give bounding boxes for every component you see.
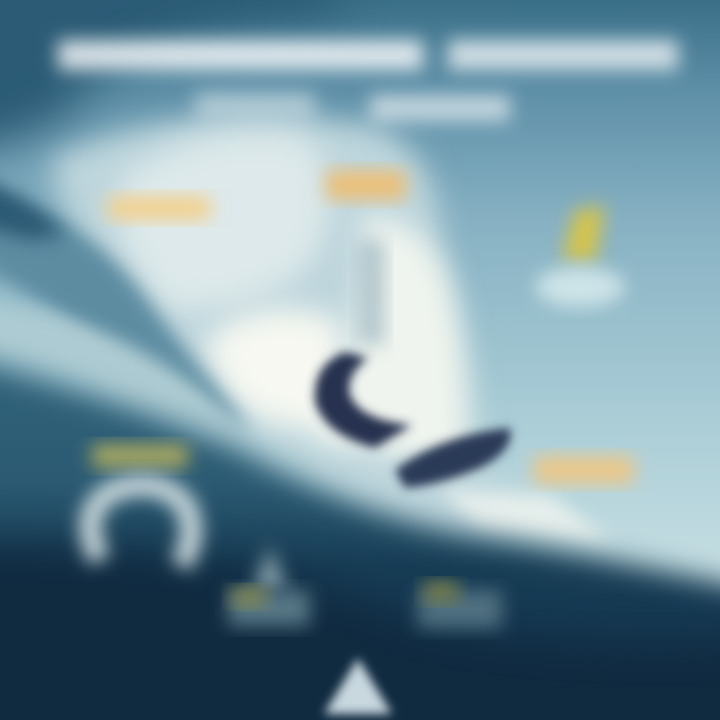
- label: lower-left olive: [92, 444, 188, 468]
- deep sea: [0, 346, 720, 684]
- dark top-left corner: [0, 0, 338, 170]
- label: right orange: [534, 456, 634, 484]
- icon: yellow bolt with cloud: [535, 206, 625, 307]
- bottom darkness: [0, 532, 720, 720]
- icon: lower triangle with label: [228, 545, 310, 626]
- icon: white mountain at bottom: [324, 658, 392, 714]
- surfer figure: dark curve and board: [315, 352, 511, 488]
- title: [58, 40, 678, 121]
- label: left orange: [108, 196, 210, 220]
- icon: white horseshoe ring: [90, 485, 191, 565]
- label: top centre orange: [326, 170, 406, 200]
- icon: lower right label: [418, 582, 502, 628]
- dark wave band left: [0, 174, 254, 434]
- wave and spray mass: [50, 116, 615, 545]
